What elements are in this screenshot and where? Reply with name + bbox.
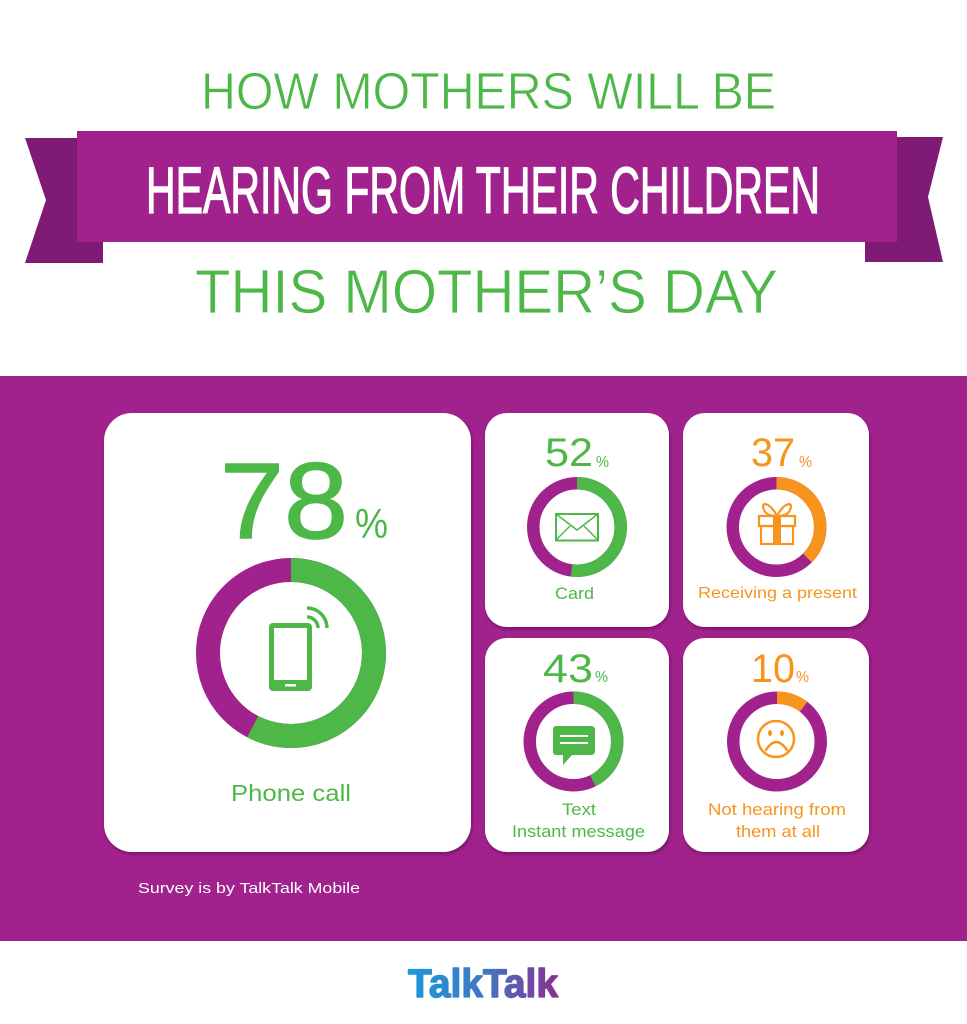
card background [683, 413, 869, 627]
ribbon main band [77, 131, 897, 242]
stat: 37 percent: % [799, 454, 812, 471]
donut chart: card [533, 483, 621, 571]
card background [683, 638, 869, 852]
stat: 43 percent: % [595, 669, 608, 686]
icon: smartphone with signal [269, 608, 327, 691]
stat: 37 percent: 37 [751, 431, 795, 475]
survey source note: Survey is by TalkTalk Mobile [138, 880, 360, 897]
label: text instant message [512, 800, 645, 841]
stat: 52 percent: % [596, 454, 609, 471]
label: phone call: Phone call [231, 780, 351, 806]
label: text instant message: Instant message [512, 822, 645, 841]
stat: 10 percent: 10 [751, 647, 795, 691]
panel: phone call [104, 413, 471, 852]
label: text instant message: Text [562, 800, 596, 819]
ribbon right tail [865, 137, 943, 262]
label: not hearing from them at all: Not hearing from [708, 800, 846, 819]
ribbon left tail [25, 138, 103, 263]
panel: not hearing [683, 638, 869, 852]
panel: text or instant message [485, 638, 669, 852]
label: receiving a present: Receiving a present [698, 585, 858, 602]
donut chart: phone call [208, 570, 374, 736]
panel: card [485, 413, 669, 627]
card background [485, 638, 669, 852]
label: not hearing from them at all: them at all [736, 822, 820, 841]
logo: TalkTalk: TalkTalk [408, 962, 559, 1006]
stat: 52 percent [545, 431, 609, 475]
donut chart: not hearing [733, 698, 821, 785]
icon: speech bubble [553, 726, 595, 765]
label: not hearing from them at all [708, 800, 846, 841]
donut chart: text [530, 698, 617, 785]
label: card: Card [555, 584, 594, 603]
panel: receiving a present [683, 413, 869, 627]
stat: 10 percent: % [796, 669, 809, 686]
stat: 78 percent: 78 [220, 440, 348, 561]
card background [104, 413, 471, 852]
stat: 78 percent: % [355, 500, 388, 547]
ribbon banner [25, 131, 943, 263]
icon: envelope [556, 514, 598, 540]
donut chart: present [733, 483, 820, 571]
card background [485, 413, 669, 627]
title line: how mothers will be: HOW MOTHERS WILL BE [201, 63, 776, 121]
stat: 43 percent [543, 647, 608, 691]
icon: sad face [758, 721, 794, 757]
title line: this mother's day: THIS MOTHER’S DAY [195, 258, 778, 327]
stat: 52 percent: 52 [545, 431, 593, 475]
icon: gift box [759, 504, 795, 544]
purple background panel [0, 376, 967, 941]
stat: 43 percent: 43 [543, 647, 593, 691]
